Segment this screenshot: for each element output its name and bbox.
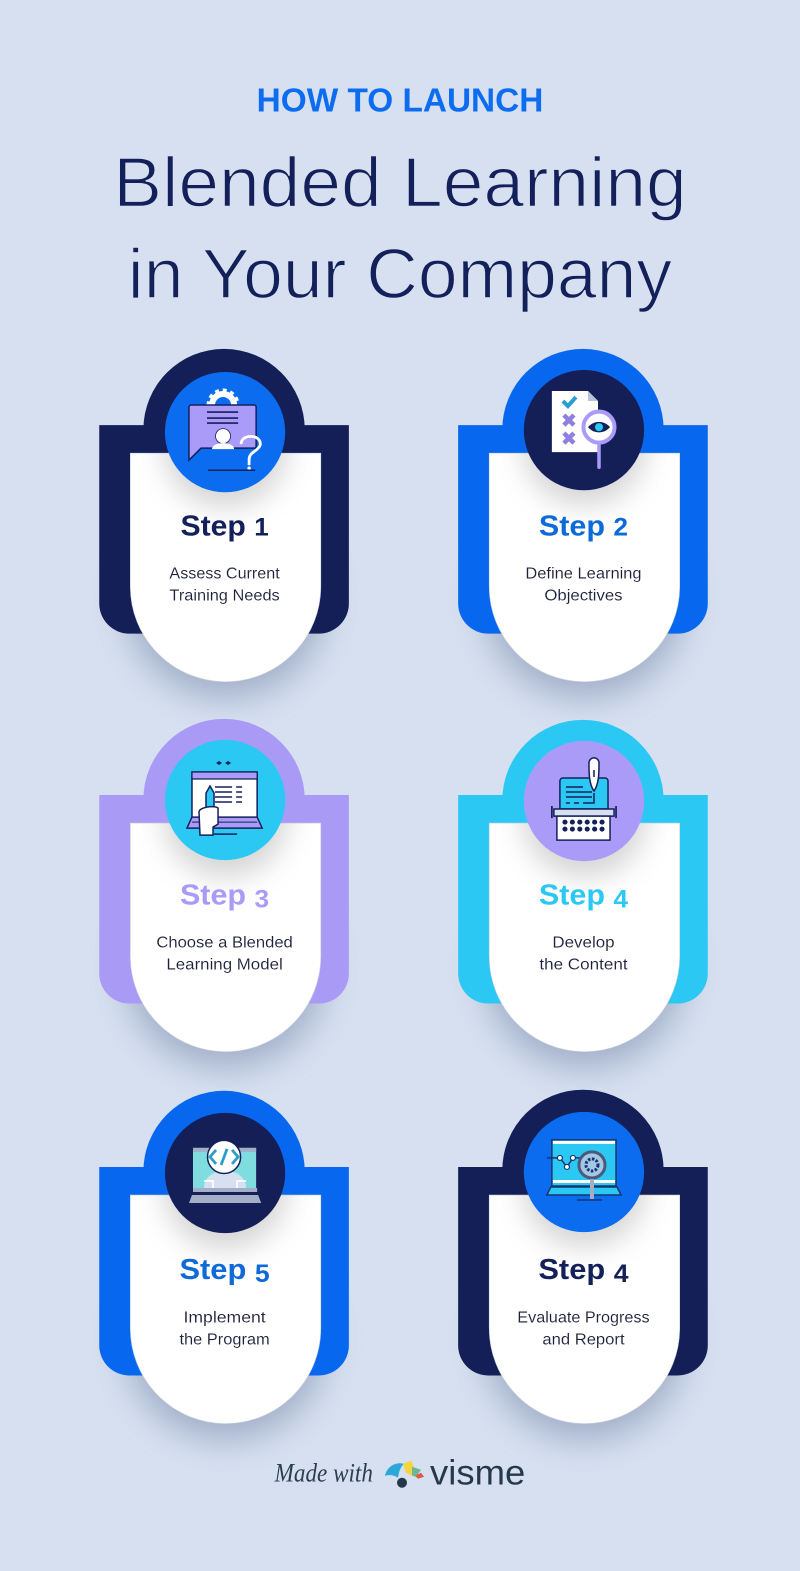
- panel: step 5: [99, 1091, 349, 1440]
- panel: step 6 evaluate: [458, 1090, 708, 1440]
- icon: coder at laptop: [165, 1113, 285, 1233]
- icon: checklist with magnifier: [524, 370, 644, 490]
- step description: [525, 565, 642, 605]
- step description: Evaluate Progress: [517, 1309, 650, 1326]
- heading: how to launch: HOW TO LAUNCH: [257, 82, 543, 119]
- step description: [169, 565, 280, 605]
- title line 2: in Your Company: [128, 234, 672, 313]
- icon: profile speech bubble: [165, 372, 285, 492]
- step description: Objectives: [544, 588, 623, 605]
- step label: Step: [179, 1254, 242, 1286]
- step description: the Program: [179, 1331, 270, 1348]
- step description: Implement: [183, 1309, 266, 1326]
- icon: laptop with hand and pen: [165, 740, 285, 860]
- step description: [539, 934, 628, 973]
- step description: Define Learning: [525, 565, 642, 582]
- step label: Step: [539, 879, 602, 911]
- step description: Learning Model: [166, 956, 283, 973]
- icon: laptop with analytics magnifier: [524, 1112, 644, 1232]
- step label: Step 2: [539, 510, 628, 542]
- step description: Training Needs: [169, 588, 280, 605]
- step label: 5: [255, 1260, 270, 1288]
- step label: Step 1: [180, 510, 269, 542]
- visme wordmark: visme: [430, 1454, 525, 1493]
- icon: typewriter with quill: [524, 741, 644, 861]
- step description: Assess Current: [169, 565, 280, 582]
- step label: Step: [180, 879, 243, 911]
- panel: step 2: [458, 349, 708, 698]
- step label: Step: [538, 1254, 601, 1286]
- step description: the Content: [539, 956, 628, 973]
- step label: 3: [255, 885, 269, 913]
- step description: Develop: [552, 934, 615, 951]
- step description: [156, 934, 293, 973]
- title line 1: Blended Learning: [113, 143, 687, 222]
- footer: made with visme: [274, 1454, 525, 1493]
- panel: step 4 develop: [458, 720, 708, 1068]
- step label: 4: [613, 885, 628, 913]
- step description: Choose a Blended: [156, 934, 293, 951]
- made with text: Made with: [274, 1459, 373, 1488]
- icon: visme logo: [385, 1461, 424, 1488]
- panel: step 3: [99, 719, 349, 1068]
- step description: [179, 1309, 270, 1348]
- panel: step 1: [99, 349, 349, 698]
- step label: 4: [614, 1260, 629, 1288]
- step description: and Report: [542, 1331, 625, 1348]
- step description: [517, 1309, 650, 1348]
